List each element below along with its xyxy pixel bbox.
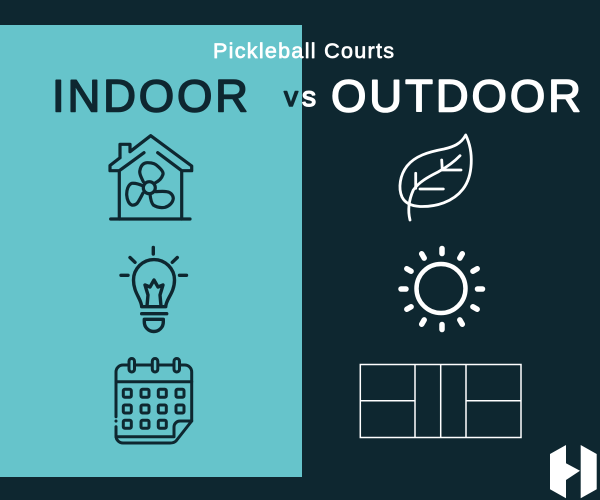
- icon: leaf: [400, 135, 471, 220]
- heading: vs: [284, 81, 316, 112]
- panel: indoor teal: [0, 25, 302, 477]
- icon: light bulb: [121, 248, 186, 332]
- title: Pickleball Courts: [213, 39, 394, 63]
- heading: vs: s: [302, 81, 316, 112]
- logo: H mark: [550, 445, 597, 498]
- heading: indoor: INDOOR: [52, 70, 248, 122]
- icon: pickleball court diagram: [360, 364, 521, 438]
- heading: vs: v: [284, 81, 298, 112]
- icon: sun: [401, 248, 482, 330]
- icon: house with fan: [110, 136, 192, 219]
- icon: calendar: [116, 358, 192, 443]
- heading: outdoor: OUTDOOR: [331, 70, 581, 122]
